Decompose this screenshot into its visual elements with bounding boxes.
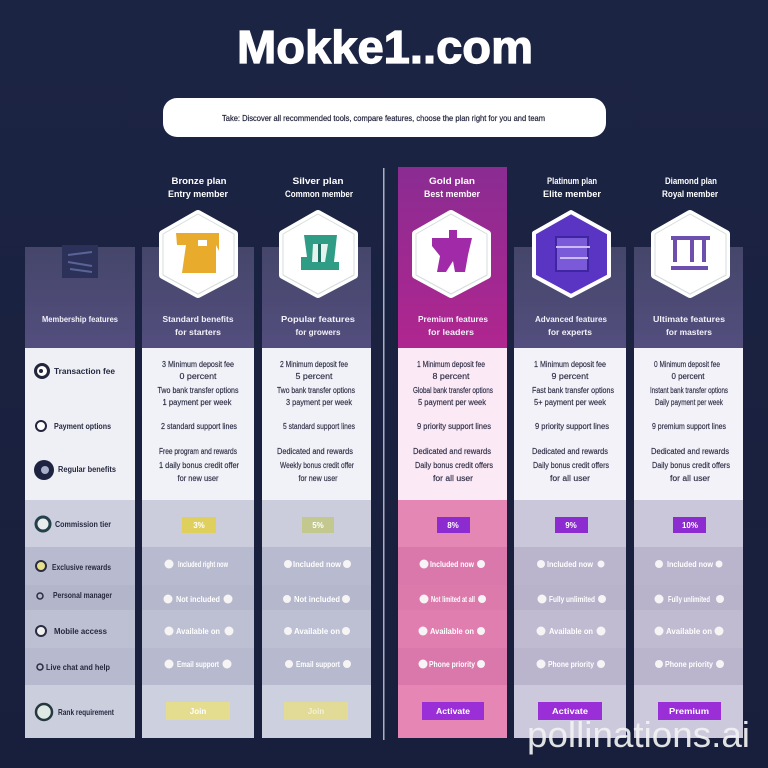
feature list: Included now: [293, 560, 342, 569]
subtitle pill: [163, 98, 606, 137]
plan details: Free program and rewards: [159, 447, 237, 456]
centre divider: [383, 168, 384, 740]
button: Activate: [552, 707, 589, 716]
plan subtitle: for masters: [666, 327, 712, 337]
button: [658, 702, 721, 720]
button: Activate: [436, 707, 471, 716]
button: [538, 702, 602, 720]
button: [284, 702, 348, 720]
panel: plan five: [634, 176, 743, 738]
plan details: 0 percent: [672, 372, 705, 381]
row label: option three: Mobile access: [54, 627, 108, 636]
feature list: Phone priority: [548, 660, 594, 669]
feature list: Included now: [430, 560, 475, 569]
plan details: Dedicated and rewards: [651, 447, 729, 456]
title: Mokke1..com: [237, 21, 533, 73]
feature list: Phone priority: [665, 660, 713, 669]
plan details: 5+ payment per week: [534, 398, 607, 407]
plan details: for all user: [670, 474, 710, 483]
plan subtitle: for leaders: [428, 327, 474, 337]
plan details: [158, 360, 239, 483]
plan name: Entry member: [168, 189, 228, 199]
plan subtitle: [535, 314, 607, 337]
icon: magenta hexagon: [416, 214, 487, 294]
badge: 8%: [447, 521, 459, 530]
row label: speed: [36, 364, 116, 378]
feature list: Available on: [666, 627, 712, 636]
plan subtitle: Ultimate features: [653, 314, 725, 324]
row label: option one: Exclusive rewards: [52, 563, 111, 572]
plan details: Daily bonus credit offers: [652, 461, 730, 470]
panel: feature labels column: [25, 245, 135, 738]
button: Join: [190, 707, 206, 716]
row label: badge: Commission tier: [55, 520, 111, 529]
feature list: [164, 560, 234, 669]
plan details: 0 percent: [180, 372, 217, 381]
button: [422, 702, 484, 720]
plan subtitle: Popular features: [281, 314, 355, 324]
plan subtitle: Premium features: [418, 314, 488, 324]
panel: plan three highlighted: [398, 167, 507, 738]
plan subtitle: for experts: [548, 327, 592, 337]
button: Premium: [669, 707, 709, 716]
row label: speed: Transaction fee: [54, 367, 116, 376]
feature list: [283, 560, 351, 669]
row label: option one: [36, 561, 111, 572]
plan details: Global bank transfer options: [413, 386, 493, 395]
plan details: 0 Minimum deposit fee: [654, 360, 720, 369]
plan details: 9 priority support lines: [417, 422, 491, 431]
plan details: Daily bonus credit offers: [415, 461, 493, 470]
plan details: Dedicated and rewards: [413, 447, 491, 456]
badge: [437, 517, 470, 533]
panel: plan two: [262, 176, 371, 738]
plan name: Diamond plan: [665, 176, 717, 186]
feature list: Not included: [176, 595, 220, 604]
feature list: [536, 560, 606, 669]
plan details: Two bank transfer options: [158, 386, 238, 395]
panel: plan one: [142, 176, 254, 738]
plan name: Royal member: [662, 189, 718, 199]
plan details: Daily bonus credit offers: [533, 461, 609, 470]
plan subtitle: [281, 314, 355, 337]
plan name: Gold plan: [429, 176, 475, 186]
plan details: 1 Minimum deposit fee: [417, 360, 485, 369]
plan details: for new user: [298, 474, 338, 483]
plan details: 1 payment per week: [162, 398, 232, 407]
watermark: pollinations.ai: [527, 714, 750, 755]
badge: [302, 517, 334, 533]
plan name: Platinum plan: [547, 176, 597, 186]
icon: green hexagon: [283, 214, 354, 294]
plan details: 9 percent: [552, 372, 589, 381]
plan subtitle: [162, 314, 234, 337]
plan details: Dedicated and rewards: [277, 447, 353, 456]
plan subtitle: Advanced features: [535, 314, 607, 324]
feature list: Email support: [296, 660, 340, 669]
feature list: Included right now: [178, 560, 229, 569]
plan name: Elite member: [543, 189, 602, 199]
badge: 10%: [682, 521, 698, 530]
feature list: Fully unlimited: [549, 595, 595, 604]
plan details: Instant bank transfer options: [650, 386, 728, 395]
row label: option two: [37, 591, 112, 600]
plan details: [277, 360, 355, 483]
plan name: [662, 176, 718, 199]
plan details: 3 payment per week: [286, 398, 353, 407]
plan name: [543, 176, 602, 199]
column heading: Membership features: [42, 314, 118, 324]
feature list: Available on: [294, 627, 340, 636]
plan subtitle: for growers: [296, 327, 341, 337]
plan details: 5 payment per week: [418, 398, 487, 407]
plan details: 8 percent: [432, 372, 470, 381]
row label: option three: [36, 626, 108, 636]
plan details: 2 standard support lines: [161, 422, 237, 431]
badge: [182, 517, 216, 533]
icon: gold hexagon: [163, 214, 234, 294]
plan name: [424, 176, 480, 199]
feature list: Available on: [176, 627, 220, 636]
icon: header emblem: [62, 245, 98, 278]
plan subtitle: [418, 314, 488, 337]
badge: [673, 517, 706, 533]
badge: 5%: [312, 521, 324, 530]
row label: security: [34, 460, 117, 480]
plan details: 1 Minimum deposit fee: [534, 360, 606, 369]
plan details: 5 standard support lines: [283, 422, 355, 431]
plan details: [413, 360, 493, 483]
plan details: 1 daily bonus credit offer: [159, 461, 239, 470]
subtitle pill: Take: Discover all recommended tools, compare features, choose the plan right for you and team: [222, 113, 545, 123]
plan subtitle: for starters: [175, 327, 221, 337]
feature list: [418, 560, 486, 669]
icon: white hexagon: [655, 214, 726, 294]
feature list: Not included: [294, 595, 340, 604]
feature list: Email support: [177, 660, 219, 669]
plan details: [650, 360, 730, 483]
plan details: for all user: [550, 474, 590, 483]
plan details: 2 Minimum deposit fee: [280, 360, 348, 369]
button: Join: [308, 707, 324, 716]
feature list: Included now: [667, 560, 714, 569]
plan name: Common member: [285, 189, 353, 199]
plan details: Fast bank transfer options: [532, 386, 614, 395]
plan name: Silver plan: [292, 176, 344, 186]
plan details: [532, 360, 614, 483]
feature list: Fully unlimited: [668, 595, 710, 604]
plan subtitle: [653, 314, 725, 337]
plan details: for all user: [433, 474, 473, 483]
row label: security: Regular benefits: [58, 465, 117, 474]
feature list: Available on: [430, 627, 474, 636]
feature list: Phone priority: [429, 660, 475, 669]
icon: violet hexagon: [534, 212, 609, 296]
feature list: [654, 560, 724, 669]
plan details: 5 percent: [296, 372, 333, 381]
plan details: 9 priority support lines: [535, 422, 609, 431]
plan details: Weekly bonus credit offer: [280, 461, 354, 470]
row label: upgrade: [36, 704, 114, 720]
row label: support: Payment options: [54, 422, 111, 431]
plan details: Two bank transfer options: [277, 386, 355, 395]
row label: upgrade: Rank requirement: [58, 708, 114, 717]
row label: badge: [36, 517, 111, 531]
plan name: Best member: [424, 189, 480, 199]
row label: option two: Personal manager: [53, 591, 112, 600]
plan name: [285, 176, 353, 199]
plan details: 9 premium support lines: [652, 422, 726, 431]
badge: 9%: [565, 521, 577, 530]
feature list: Not limited at all: [431, 595, 475, 604]
feature list: Included now: [547, 560, 594, 569]
badge: [555, 517, 588, 533]
row label: support: [36, 421, 111, 431]
plan details: 3 Minimum deposit fee: [162, 360, 234, 369]
panel: plan four: [514, 176, 626, 738]
button: [166, 702, 230, 720]
row label: option four: Live chat and help: [46, 663, 110, 672]
badge: 3%: [193, 521, 205, 530]
plan details: for new user: [178, 474, 219, 483]
feature list: Available on: [549, 627, 593, 636]
plan name: [168, 176, 228, 199]
plan details: Daily payment per week: [655, 398, 724, 407]
plan name: Bronze plan: [172, 176, 226, 186]
plan details: Dedicated and rewards: [532, 447, 608, 456]
plan subtitle: Standard benefits: [162, 314, 234, 324]
